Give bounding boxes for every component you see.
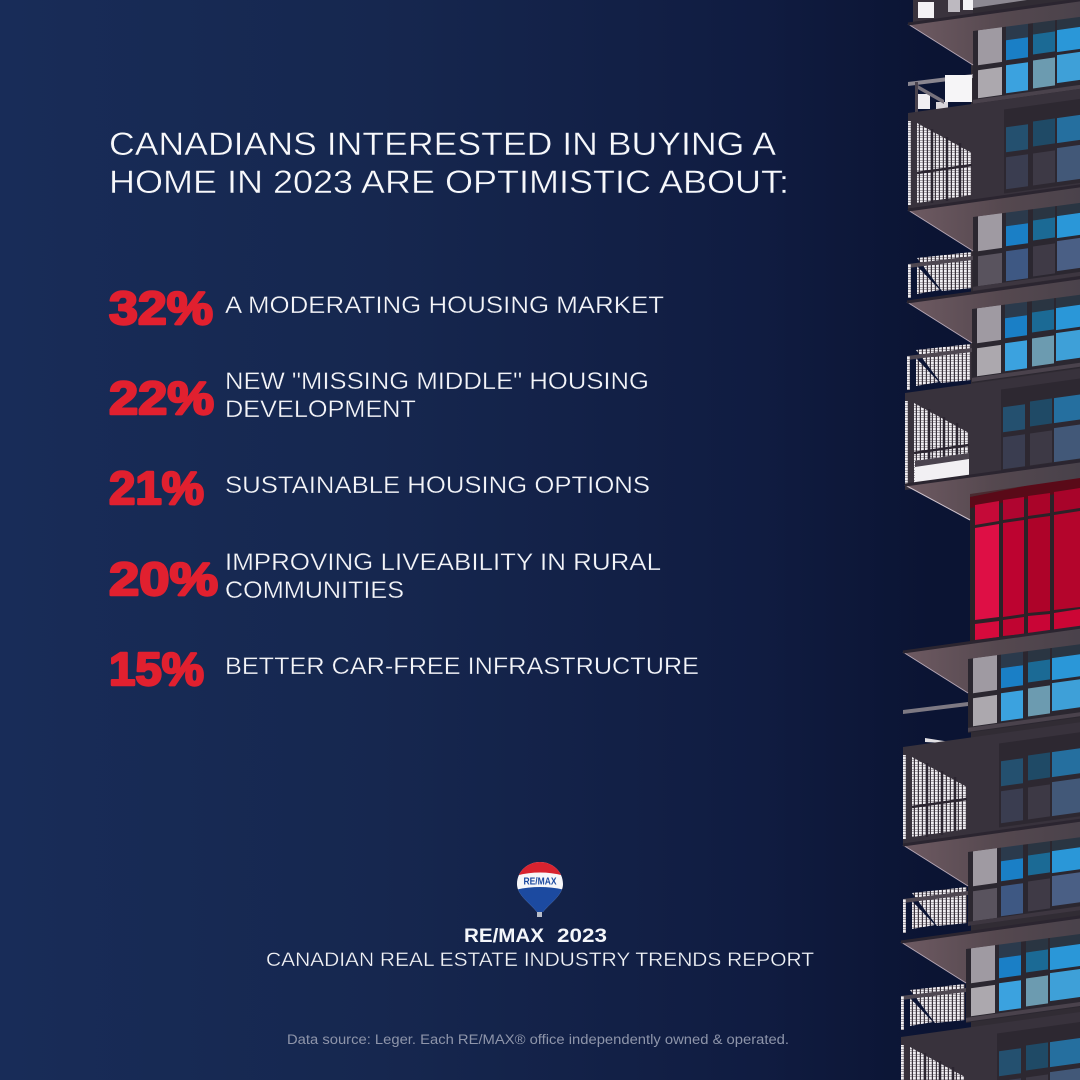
icon: RE/MAX balloon logo: RE/MAX	[524, 876, 556, 888]
stat row: 21%: 21%	[109, 462, 204, 514]
brand line: 2023	[557, 925, 607, 947]
icon: RE/MAX balloon logo	[517, 862, 563, 917]
brand line: RE/MAX	[464, 925, 544, 947]
report title: CANADIAN REAL ESTATE INDUSTRY TRENDS REPORT	[266, 949, 814, 971]
stat row: 20%: IMPROVING LIVEABILITY IN RURAL	[225, 549, 661, 576]
stat row: 21%: SUSTAINABLE HOUSING OPTIONS	[225, 472, 650, 499]
stat row: 22%: 22%	[109, 372, 214, 424]
stat row: 22%	[109, 368, 649, 424]
panel floor two	[905, 366, 1080, 490]
title: HOME IN 2023 ARE OPTIMISTIC ABOUT:	[109, 164, 789, 200]
source note: Data source: Leger. Each RE/MAX® office independently owned & operated.	[287, 1032, 789, 1047]
stat row: 32%	[109, 282, 664, 334]
title	[109, 126, 789, 200]
stat row: 15%: BETTER CAR-FREE INFRASTRUCTURE	[225, 653, 699, 680]
stat row: 15%: 15%	[109, 643, 204, 695]
top balcony	[913, 0, 1027, 24]
panel floor three	[903, 720, 1080, 844]
stat row: 20%	[109, 549, 661, 605]
stat row: 20%: COMMUNITIES	[225, 577, 404, 604]
stat row: 21%	[109, 462, 650, 514]
floor five	[903, 818, 1080, 933]
stat row: 15%	[109, 643, 699, 695]
floor two	[908, 183, 1080, 298]
stat row: 32%: A MODERATING HOUSING MARKET	[225, 292, 664, 319]
floor six	[901, 915, 1080, 1030]
stat row: 32%: 32%	[109, 282, 213, 334]
floor with red facade	[905, 461, 1080, 645]
panel floor four	[901, 1010, 1080, 1080]
floor four	[903, 625, 1080, 744]
brand line	[464, 925, 607, 947]
title: CANADIANS INTERESTED IN BUYING A	[109, 126, 776, 162]
floor one	[908, 0, 1080, 112]
stat row: 22%: NEW "MISSING MIDDLE" HOUSING	[225, 368, 649, 395]
floor three	[907, 275, 1080, 390]
panel floor one	[908, 86, 1080, 210]
building photo	[901, 0, 1080, 1080]
building wall	[971, 0, 1080, 1080]
stat row: 20%: 20%	[109, 553, 218, 605]
stat row: 22%: DEVELOPMENT	[225, 396, 416, 423]
